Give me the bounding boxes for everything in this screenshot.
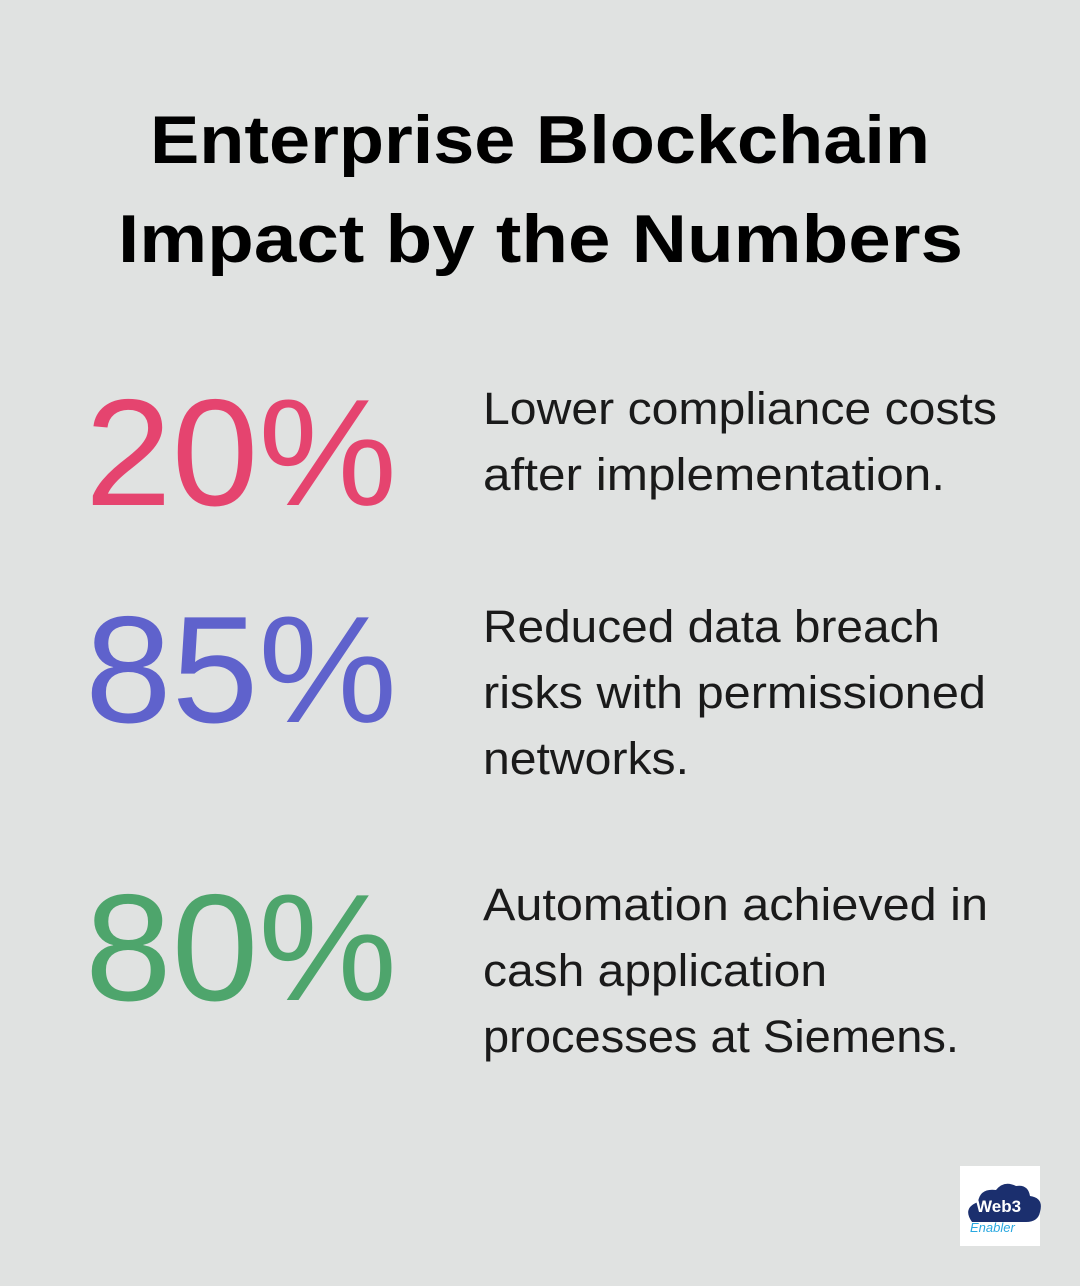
text: 85% description: networks. (483, 733, 689, 784)
title: Impact by the Numbers (118, 201, 963, 277)
stat: 20% (85, 368, 997, 538)
text: 80% description: Automation achieved in (483, 879, 988, 930)
stat: 85% (85, 585, 986, 784)
stat: 85%: 85% (85, 585, 397, 755)
text: 85% description (483, 601, 986, 784)
logo: Web3 (976, 1197, 1021, 1216)
title (118, 102, 963, 277)
logo: Enabler (970, 1220, 1015, 1235)
logo (960, 1166, 1041, 1246)
title: Enterprise Blockchain (150, 102, 930, 178)
stat: 80% (85, 863, 988, 1062)
stat: 80%: 80% (85, 863, 397, 1033)
text: 20% description: Lower compliance costs (483, 383, 997, 434)
text: 85% description: risks with permissioned (483, 667, 986, 718)
text: 20% description: after implementation. (483, 449, 945, 500)
text: 80% description: processes at Siemens. (483, 1011, 959, 1062)
text: 80% description: cash application (483, 945, 827, 996)
stat: 20%: 20% (85, 368, 397, 538)
text: 20% description (483, 383, 997, 500)
text: 85% description: Reduced data breach (483, 601, 940, 652)
text: 80% description (483, 879, 988, 1062)
